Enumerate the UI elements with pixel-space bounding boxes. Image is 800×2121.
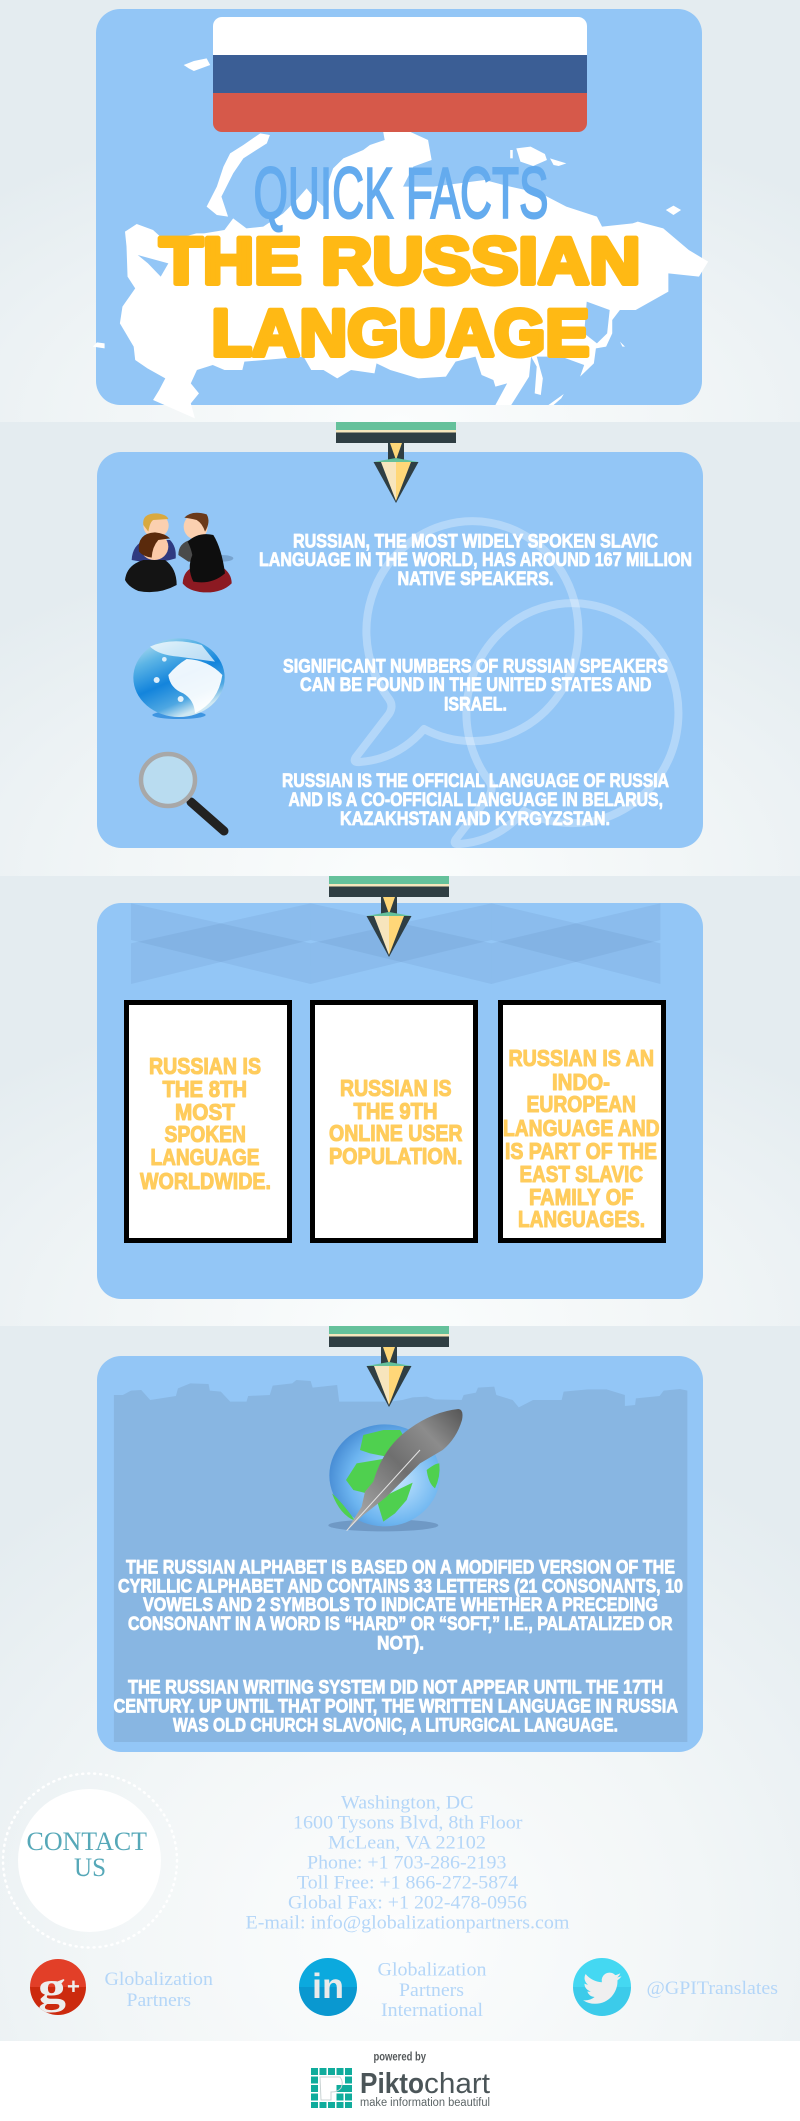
footer: piktochart branding: powered by — [374, 2052, 426, 2064]
arrow connector 2 — [329, 876, 449, 957]
icon: magnifying glass — [141, 754, 224, 831]
title: quick facts: QUICK FACTS — [254, 154, 548, 234]
title: language: LANGUAGE — [212, 296, 590, 370]
panel: title header — [93, 9, 708, 418]
card: indo-european: LANGUAGE AND — [503, 1115, 660, 1141]
footer: piktochart branding: chart — [424, 2068, 490, 2100]
arrow connector 1 — [336, 422, 456, 503]
contact details: Phone: +1 703-286-2193 — [307, 1852, 506, 1874]
card: 9th online population — [312, 1002, 476, 1240]
social: google plus — [30, 1959, 214, 2015]
contact details: 1600 Tysons Blvd, 8th Floor — [293, 1812, 523, 1834]
speech bubbles watermark — [355, 521, 678, 844]
text: alphabet: CYRILLIC ALPHABET AND CONTAINS 33 LETTERS (21 CONSONANTS, 10 — [118, 1576, 683, 1598]
panel: alphabet — [97, 1356, 703, 1752]
icon: blue globe — [133, 638, 225, 719]
social: linkedin — [299, 1958, 487, 2021]
icon: piktochart logo — [311, 2068, 352, 2108]
text: alphabet: VOWELS AND 2 SYMBOLS TO INDICATE WHETHER A PRECEDING — [143, 1595, 658, 1616]
text: alphabet: NOT). — [377, 1634, 424, 1654]
arrow connector 3 — [329, 1326, 449, 1407]
contact details: E-mail: info@globalizationpartners.com — [246, 1912, 570, 1934]
card: 9th online population: ONLINE USER — [329, 1120, 463, 1146]
card: indo-european: FAMILY OF — [529, 1184, 634, 1210]
contact badge — [3, 1774, 177, 1948]
footer: piktochart branding — [0, 2041, 800, 2121]
panel: speakers — [97, 452, 703, 848]
card: indo-european: RUSSIAN IS AN — [508, 1045, 654, 1071]
icon: linkedin: in — [312, 1967, 344, 2006]
text: speakers abroad — [283, 656, 668, 716]
card: 8th most spoken: THE 8TH — [162, 1076, 247, 1102]
text: speakers abroad: SIGNIFICANT NUMBERS OF RUSSIAN SPEAKERS — [283, 656, 668, 678]
social: linkedin: International — [381, 2000, 483, 2021]
text: speakers abroad: ISRAEL. — [444, 694, 507, 716]
background: section 3 — [0, 876, 800, 1326]
background: section 1 — [0, 0, 800, 422]
panel: rankings — [97, 903, 703, 1299]
social: linkedin: Partners — [399, 1980, 464, 2001]
text: writing system: THE RUSSIAN WRITING SYSTEM DID NOT APPEAR UNTIL THE 17TH — [128, 1678, 663, 1698]
card: 8th most spoken: LANGUAGE — [150, 1144, 260, 1170]
skyline backdrop — [114, 1380, 687, 1742]
footer: piktochart branding: Pikto — [360, 2068, 424, 2100]
text: alphabet: THE RUSSIAN ALPHABET IS BASED ON A MODIFIED VERSION OF THE — [126, 1558, 675, 1578]
text: official language: AND IS A CO-OFFICIAL LANGUAGE IN BELARUS, — [288, 790, 663, 811]
icon: linkedin — [299, 1958, 357, 2016]
text: native speakers: RUSSIAN, THE MOST WIDELY SPOKEN SLAVIC — [293, 532, 658, 552]
social: google plus: Partners — [126, 1990, 191, 2011]
text: official language: RUSSIAN IS THE OFFICIAL LANGUAGE OF RUSSIA — [282, 771, 669, 792]
icon: google plus — [30, 1959, 86, 2015]
card: 8th most spoken: RUSSIAN IS — [149, 1053, 261, 1079]
card: indo-european: EUROPEAN — [526, 1091, 636, 1117]
card: 9th online population: THE 9TH — [354, 1098, 438, 1124]
text: alphabet: CONSONANT IN A WORD IS “HARD” OR “SOFT,” I.E., PALATALIZED OR — [128, 1614, 673, 1635]
contact details — [246, 1792, 570, 1934]
contact details: Washington, DC — [341, 1792, 474, 1814]
icon: globe with feather — [328, 1409, 463, 1531]
text: writing system — [114, 1678, 678, 1736]
background: section 4 and contact — [0, 1326, 800, 2041]
card: indo-european: LANGUAGES. — [518, 1206, 645, 1232]
card: 8th most spoken: SPOKEN — [164, 1121, 246, 1147]
card: 8th most spoken — [126, 1002, 290, 1240]
icon: google plus: + — [67, 1974, 80, 1999]
card: indo-european — [500, 1002, 664, 1240]
flag of Russia — [213, 17, 587, 132]
text: writing system: CENTURY. UP UNTIL THAT POINT, THE WRITTEN LANGUAGE IN RUSSIA — [114, 1696, 678, 1718]
footer: piktochart branding: make information beautiful — [360, 2097, 490, 2109]
social: twitter: @GPITranslates — [646, 1978, 778, 1999]
card: 8th most spoken: MOST — [175, 1099, 235, 1125]
card: indo-european: EAST SLAVIC — [520, 1161, 643, 1187]
text: writing system: WAS OLD CHURCH SLAVONIC, A LITURGICAL LANGUAGE. — [173, 1716, 618, 1736]
text: official language: KAZAKHSTAN AND KYRGYZSTAN. — [340, 809, 610, 830]
diamond pattern — [131, 903, 660, 984]
text: alphabet — [118, 1558, 683, 1654]
title: the russian: THE RUSSIAN — [160, 224, 640, 298]
icon: google plus: g — [38, 1962, 66, 2013]
contact details: Global Fax: +1 202-478-0956 — [288, 1892, 527, 1914]
contact badge: US — [74, 1853, 106, 1882]
text: native speakers: NATIVE SPEAKERS. — [398, 569, 554, 590]
text: native speakers — [259, 532, 692, 590]
map of Russia — [93, 58, 708, 418]
social: linkedin: Globalization — [378, 1960, 487, 1980]
social: twitter — [573, 1958, 778, 2016]
contact details: McLean, VA 22102 — [328, 1832, 486, 1854]
text: native speakers: LANGUAGE IN THE WORLD, HAS AROUND 167 MILLION — [259, 550, 692, 571]
card: 8th most spoken: WORLDWIDE. — [140, 1168, 271, 1194]
card: 9th online population: POPULATION. — [329, 1143, 462, 1169]
icon: twitter — [573, 1958, 631, 2016]
contact badge: CONTACT — [26, 1827, 147, 1856]
icon: group of people — [125, 513, 233, 592]
social: google plus: Globalization — [104, 1969, 214, 1990]
card: indo-european: IS PART OF THE — [505, 1138, 657, 1164]
card: indo-european: INDO- — [552, 1069, 610, 1095]
card: 9th online population: RUSSIAN IS — [340, 1075, 452, 1101]
contact details: Toll Free: +1 866-272-5874 — [297, 1872, 519, 1894]
text: speakers abroad: CAN BE FOUND IN THE UNITED STATES AND — [300, 675, 652, 696]
text: official language — [282, 771, 669, 830]
background: section 2 — [0, 422, 800, 876]
